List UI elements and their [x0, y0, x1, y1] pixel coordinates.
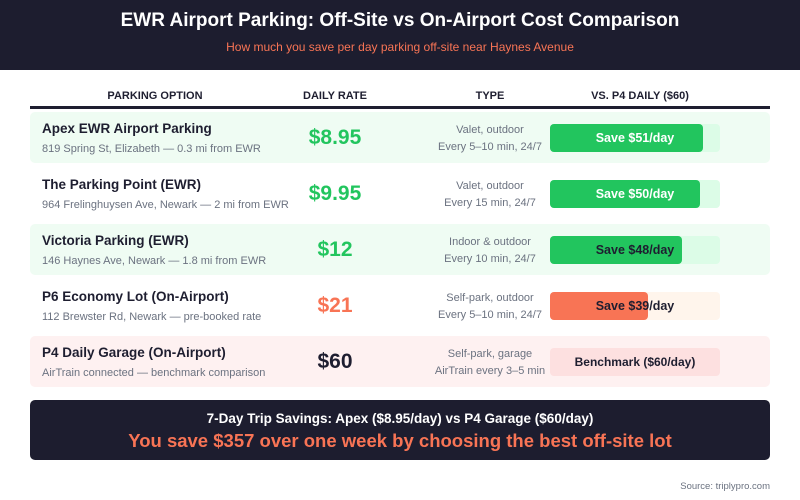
subtitle: How much you save per day parking off-site near Haynes Avenue: [226, 40, 574, 54]
row: Victoria: $12: [317, 238, 353, 261]
bar: save 48: [550, 236, 720, 264]
row: P6: Every 5–10 min, 24/7: [438, 309, 542, 321]
bar: save 39: [550, 292, 720, 320]
bar: save 48: Save $48/day: [596, 243, 674, 257]
row: P4: [30, 336, 770, 387]
row: Apex: [30, 112, 770, 163]
row: Victoria: 146 Haynes Ave, Newark — 1.8 mi from EWR: [42, 255, 266, 267]
bar: benchmark: Benchmark ($60/day): [575, 355, 695, 369]
row: Victoria: Victoria Parking (EWR): [42, 233, 189, 248]
row: Victoria: Every 10 min, 24/7: [444, 253, 536, 265]
row: Victoria: Indoor & outdoor: [449, 236, 531, 248]
row: Victoria: [30, 224, 770, 275]
bar: save 51: Save $51/day: [596, 131, 674, 145]
row: P4: AirTrain every 3–5 min: [435, 365, 545, 377]
table header: PARKING OPTION: [107, 90, 203, 102]
row: Parking Point: Valet, outdoor: [456, 180, 524, 192]
row: Apex: $8.95: [309, 126, 361, 149]
row: P4: Self-park, garage: [448, 348, 532, 360]
bar: save 50: [550, 180, 720, 208]
bar: save 51: [550, 124, 720, 152]
row: Parking Point: [30, 168, 770, 219]
bar: save 50: Save $50/day: [596, 187, 674, 201]
savings callout: 7-Day Trip Savings: Apex ($8.95/day) vs P4 Garage ($60/day): [207, 411, 593, 426]
row: P4: AirTrain connected — benchmark comparison: [42, 367, 265, 379]
source: Source: triplypro.com: [680, 481, 770, 492]
row: P4: $60: [317, 350, 353, 373]
savings callout: [30, 400, 770, 460]
savings callout: You save $357 over one week by choosing the best off-site lot: [128, 430, 672, 451]
bar: benchmark: [550, 348, 720, 376]
title: EWR Airport Parking: Off-Site vs On-Airport Cost Comparison: [121, 10, 679, 31]
row: P6: $21: [317, 294, 353, 317]
row: P6: 112 Brewster Rd, Newark — pre-booked rate: [42, 311, 261, 323]
table header: VS. P4 DAILY ($60): [591, 90, 689, 102]
table header: TYPE: [476, 90, 504, 102]
row: P6: Self-park, outdoor: [446, 292, 534, 304]
row: Apex: Valet, outdoor: [456, 124, 524, 136]
bar: save 39: Save $39/day: [596, 299, 674, 313]
row: Parking Point: $9.95: [309, 182, 361, 205]
row: Parking Point: 964 Frelinghuysen Ave, Newark — 2 mi from EWR: [42, 199, 289, 211]
header banner: [0, 0, 800, 70]
row: Apex: Every 5–10 min, 24/7: [438, 141, 542, 153]
row: Apex: 819 Spring St, Elizabeth — 0.3 mi from EWR: [42, 143, 261, 155]
row: Apex: Apex EWR Airport Parking: [42, 121, 212, 136]
row: P4: P4 Daily Garage (On-Airport): [42, 345, 226, 360]
row: P6: [30, 280, 770, 331]
row: Parking Point: Every 15 min, 24/7: [444, 197, 536, 209]
row: P6: P6 Economy Lot (On-Airport): [42, 289, 229, 304]
row: Parking Point: The Parking Point (EWR): [42, 177, 201, 192]
table header: [107, 90, 689, 102]
table header: DAILY RATE: [303, 90, 367, 102]
